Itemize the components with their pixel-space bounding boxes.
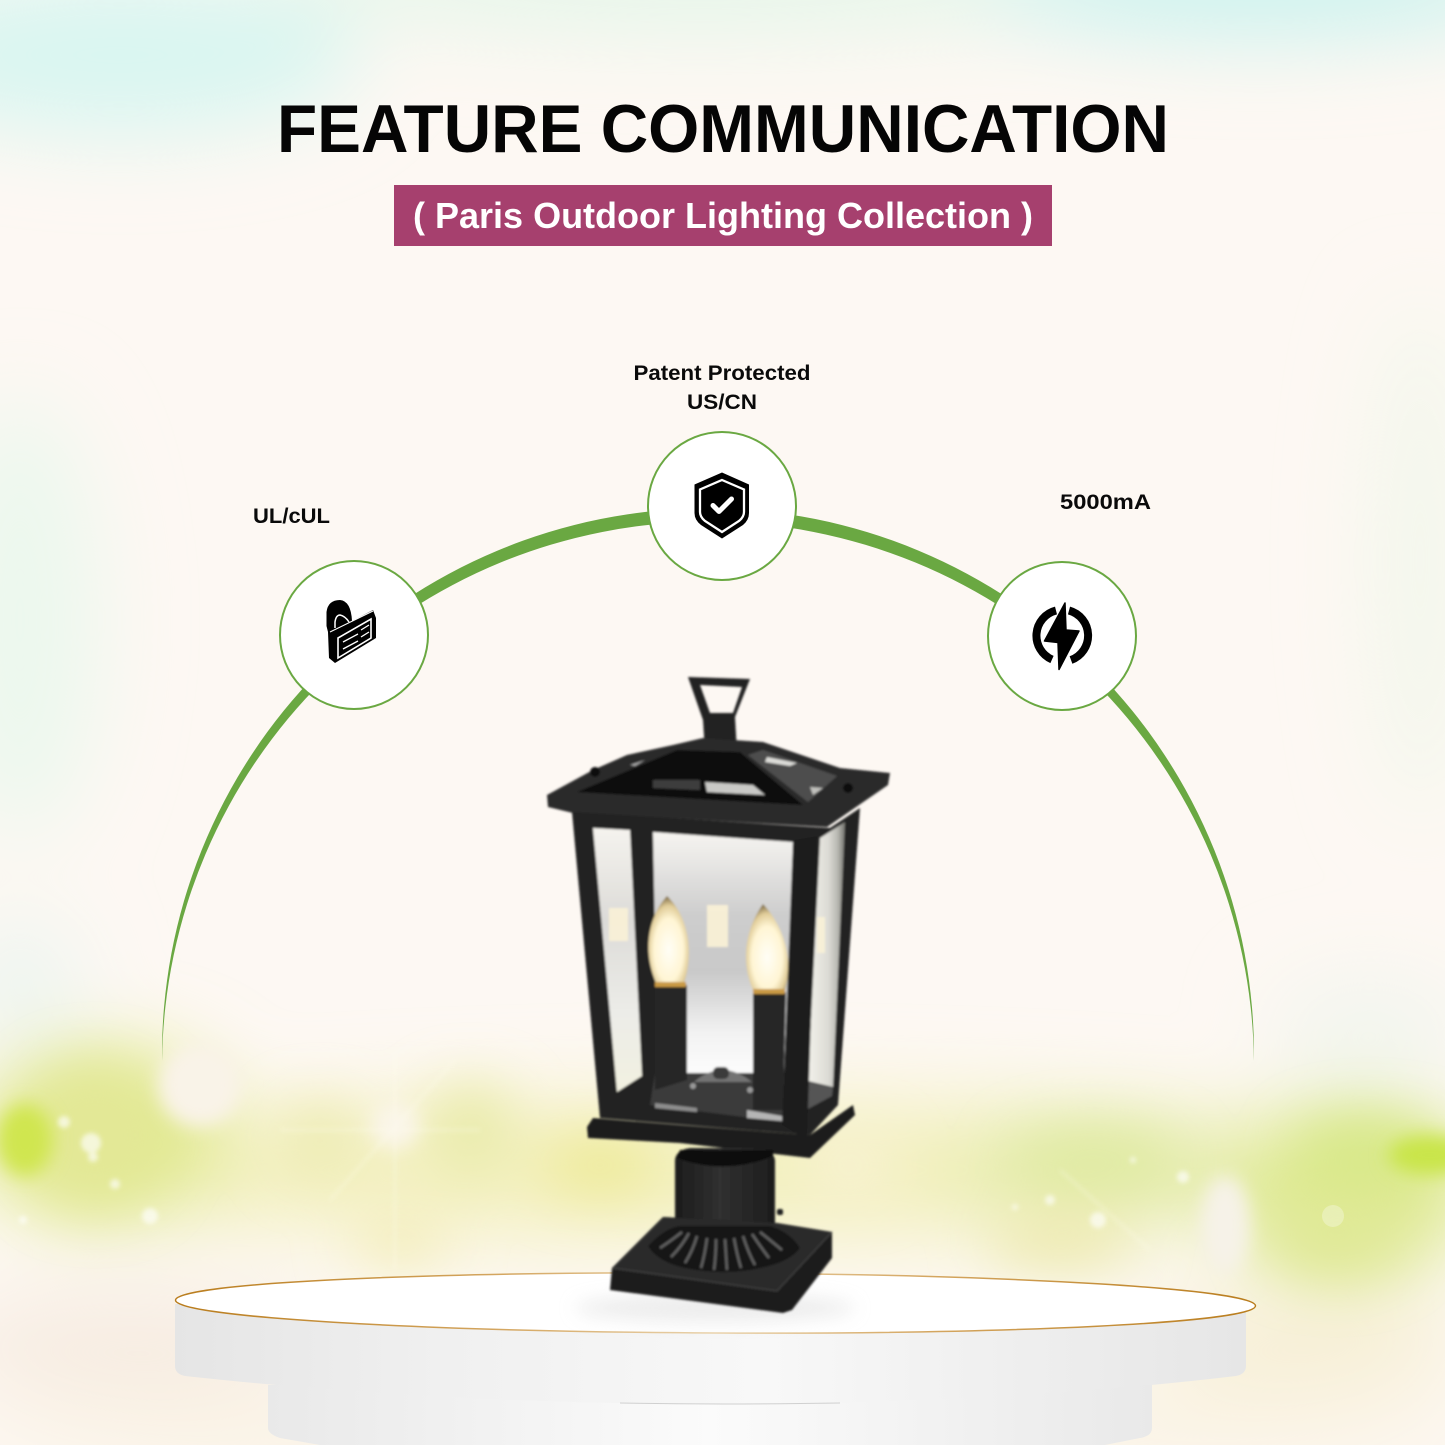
lower drum: [268, 1385, 1152, 1445]
label: UL/cUL: UL/cUL: [253, 504, 330, 528]
reflections: [609, 905, 825, 953]
left socket: [655, 985, 687, 1090]
label: 5000mA: 5000mA: [1060, 490, 1151, 514]
lamp roof: [547, 738, 890, 827]
green arc: [162, 508, 1254, 1061]
front right post: [782, 836, 817, 1140]
icon: certificate badge: [326, 600, 376, 663]
circle: patent: [648, 432, 796, 580]
platform top: [175, 1270, 1256, 1336]
feature: 5000mA: [988, 490, 1151, 710]
lamp: [547, 677, 890, 1313]
drum contact shadow: [620, 1403, 840, 1404]
scalloped collar: [648, 1226, 800, 1272]
roof details: [590, 750, 853, 802]
left glass: [593, 828, 642, 1092]
right glass: [808, 822, 845, 1087]
label: patent protected: Patent Protected: [634, 361, 810, 385]
lamp floor: [650, 1067, 833, 1122]
lamp body frame: [572, 808, 860, 1135]
icon: lightning charge: [1036, 603, 1088, 670]
lamp base plate: [587, 1105, 855, 1158]
lamp neck: [675, 1148, 783, 1240]
icon: shield with check: [694, 472, 749, 538]
label: US/CN: US/CN: [687, 390, 757, 414]
subtitle banner: [394, 185, 1052, 246]
lamp shadow: [575, 1294, 855, 1322]
upper drum: [175, 1304, 1246, 1404]
circle: 5000mA: [988, 562, 1136, 710]
left bulb: [648, 896, 689, 983]
lamp base: [610, 1217, 832, 1313]
bulb collars: [655, 982, 785, 994]
roof front panel: [577, 750, 803, 805]
feature: UL/cUL: [253, 504, 428, 709]
circle: UL: [280, 561, 428, 709]
platform: [175, 1270, 1256, 1445]
center glass: [653, 832, 793, 1110]
right bulb: [746, 904, 788, 990]
lamp handle: [688, 677, 750, 752]
right socket: [753, 992, 786, 1110]
feature: patent protected: [634, 361, 810, 580]
subtitle banner: ( Paris Outdoor Lighting Collection ): [413, 195, 1033, 236]
title: FEATURE COMMUNICATION: [277, 91, 1169, 167]
